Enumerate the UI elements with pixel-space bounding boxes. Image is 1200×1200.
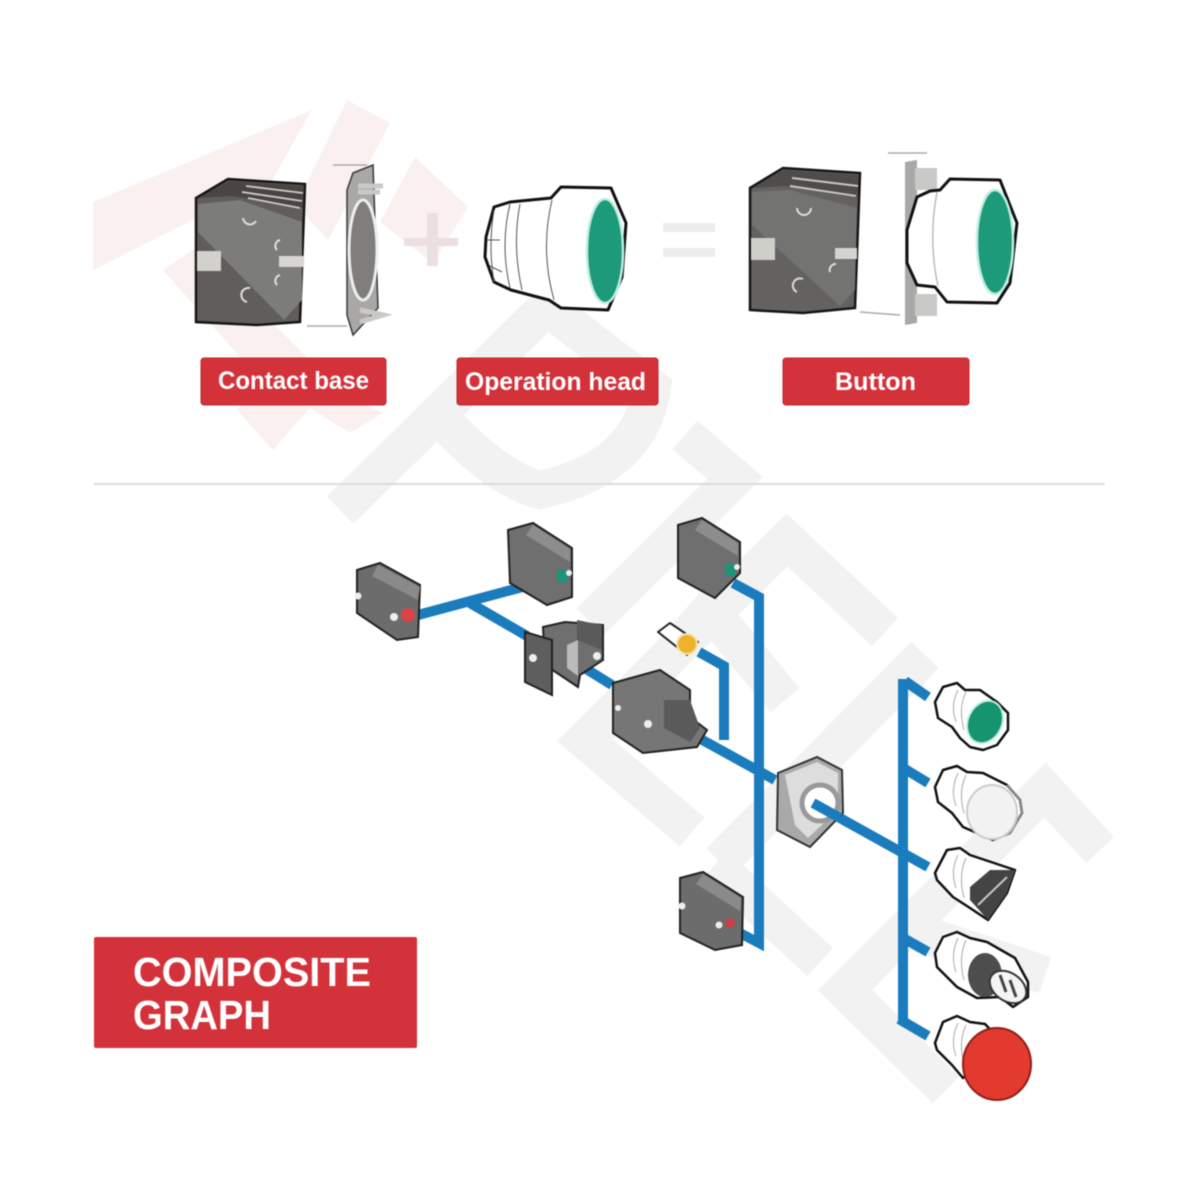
icon: contact module green upper bbox=[508, 523, 572, 605]
label: contact base: Contact base bbox=[218, 367, 369, 395]
icon: contact module red bbox=[354, 563, 420, 640]
label: button bbox=[783, 358, 969, 405]
plus sign bbox=[404, 213, 458, 266]
icon: green push button bbox=[935, 683, 1010, 750]
icon: black selector switch bbox=[935, 848, 1015, 920]
title: composite graph bbox=[94, 937, 417, 1048]
watermark: pink logo bbox=[93, 100, 468, 450]
icon: yellow bulb bbox=[658, 623, 698, 655]
icon: assembled button bbox=[750, 153, 1017, 325]
icon: switch block bbox=[613, 670, 707, 753]
blue line through bracket bbox=[813, 803, 840, 818]
icon: mounting bracket bbox=[777, 757, 843, 847]
label: contact base bbox=[201, 358, 386, 405]
blue connection lines bbox=[418, 583, 928, 1036]
icon: contact module green right bbox=[678, 518, 740, 598]
icon: operation head bbox=[485, 187, 626, 310]
label: button: Button bbox=[835, 368, 916, 396]
icon: key switch bbox=[935, 932, 1032, 1010]
label: operation head bbox=[457, 358, 658, 405]
icon: contact base bbox=[196, 165, 383, 335]
watermark: gray logo bbox=[340, 307, 1100, 1090]
title: composite graph: GRAPH bbox=[133, 992, 271, 1038]
title: composite graph: COMPOSITE bbox=[133, 949, 371, 995]
icon: clamp module bbox=[525, 620, 603, 695]
label: operation head: Operation head bbox=[465, 368, 646, 396]
icon: red emergency stop bbox=[935, 1016, 1031, 1100]
icon: contact module red lower bbox=[678, 872, 743, 950]
icon: white mushroom lens button bbox=[935, 766, 1022, 840]
equals sign bbox=[663, 223, 715, 257]
